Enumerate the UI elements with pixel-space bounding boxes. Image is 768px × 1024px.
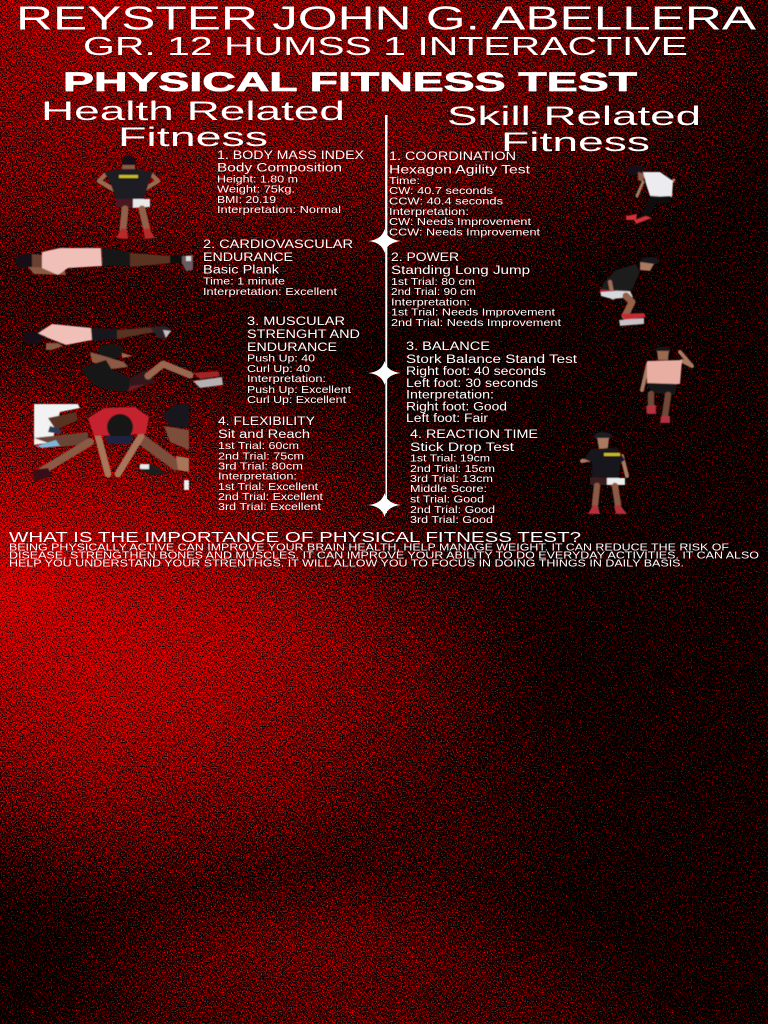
text block: coordination: Time:	[389, 175, 420, 187]
text block: coordination: CCW: Needs Improvement	[389, 226, 540, 238]
text block: reaction time	[410, 429, 538, 526]
text block: flexibility: 2nd Trial: 75cm	[218, 450, 304, 462]
heading: health related fitness: Fitness	[118, 122, 268, 152]
heading: health related fitness: Health Related	[41, 96, 345, 126]
heading: skill related fitness: Skill Related	[447, 101, 701, 131]
text block: cardiovascular endurance: 2. CARDIOVASCULAR	[203, 239, 353, 251]
heading: physical fitness test: PHYSICAL FITNESS TEST	[63, 67, 638, 97]
text block: balance	[406, 341, 578, 425]
text block: power	[391, 252, 561, 329]
text block: body mass index: 1. BODY MASS INDEX	[217, 150, 364, 162]
text block: coordination	[389, 151, 540, 238]
text block: reaction time: Middle Score:	[410, 483, 487, 495]
text block: reaction time: 3rd Trial: 13cm	[410, 473, 493, 485]
text block: muscular strength and endurance	[247, 316, 360, 406]
text block: muscular strength and endurance: Interpretation:	[247, 373, 326, 385]
text block: body mass index: Height: 1.80 m	[217, 174, 298, 186]
text block: muscular strength and endurance: Curl Up: Excellent	[247, 394, 346, 406]
text block: balance: Left foot: Fair	[406, 413, 488, 425]
heading: skill related fitness	[447, 101, 701, 157]
text block: power: 2nd Trial: 90 cm	[391, 286, 476, 298]
text block: body mass index: BMI: 20.19	[217, 194, 276, 206]
text block: balance: Left foot: 30 seconds	[406, 378, 538, 390]
text block: cardiovascular endurance: Basic Plank	[203, 264, 279, 276]
text block: reaction time: 4. REACTION TIME	[410, 429, 538, 441]
text block: muscular strength and endurance: ENDURANCE	[247, 342, 337, 354]
text block: body mass index	[217, 150, 364, 216]
text block: reaction time: 2nd Trial: 15cm	[410, 463, 495, 475]
text block: importance explanation: BEING PHYSICALLY ACTIVE CAN IMPROVE YOUR BRAIN HEALTH, HELP MANAGE WEIGHT. IT CAN REDUCE THE RISK OF	[9, 542, 729, 554]
text block: muscular strength and endurance: Push Up: Excellent	[247, 384, 351, 396]
text block: balance: Interpretation:	[406, 390, 494, 402]
heading: health related fitness	[41, 96, 345, 152]
text block: importance explanation: DISEASE, STRENGTHEN BONES AND MUSCLES. IT CAN IMPROVE YOUR ABILITY TO DO EVERYDAY ACTIVITIES. IT CAN ALSO	[9, 550, 759, 562]
text block: coordination: CW: Needs Improvement	[389, 216, 531, 228]
text block: muscular strength and endurance: STRENGHT AND	[247, 329, 360, 341]
text block: importance explanation: HELP YOU UNDERSTAND YOUR STRENTHGS. IT WILL ALLOW YOU TO FOCUS IN DOING THINGS IN DAILY BASIS.	[9, 558, 684, 570]
photo: reaction time figure	[582, 432, 627, 514]
text block: power: 2. POWER	[391, 252, 459, 264]
text block: body mass index: Body Composition	[217, 162, 342, 174]
text block: cardiovascular endurance: ENDURANCE	[203, 252, 293, 264]
text block: muscular strength and endurance: Push Up: 40	[247, 352, 315, 364]
text block: power: 1st Trial: Needs Improvement	[391, 306, 555, 318]
photo: power figure	[600, 257, 660, 326]
text block: flexibility: 4. FLEXIBILITY	[218, 416, 315, 428]
title: student name: REYSTER JOHN G. ABELLERA	[16, 0, 756, 36]
photo: curl up figure	[81, 344, 223, 392]
heading: importance question: WHAT IS THE IMPORTANCE OF PHYSICAL FITNESS TEST?	[9, 529, 581, 546]
text block: coordination: 1. COORDINATION	[389, 151, 516, 163]
subtitle: grade and section: GR. 12 HUMSS 1 INTERACTIVE	[83, 31, 688, 61]
photo: sit and reach figure	[33, 404, 189, 490]
text block: reaction time: 1st Trial: 19cm	[410, 452, 490, 464]
text block: body mass index: Weight: 75kg.	[217, 184, 295, 196]
text block: power: Standing Long Jump	[391, 265, 530, 277]
text block: muscular strength and endurance: 3. MUSCULAR	[247, 316, 345, 328]
text block: balance: Right foot: 40 seconds	[406, 366, 546, 378]
text block: balance: Stork Balance Stand Test	[406, 354, 578, 366]
timeline divider with sparkles	[368, 115, 401, 517]
text block: flexibility: 2nd Trial: Excellent	[218, 491, 323, 503]
text block: cardiovascular endurance	[203, 239, 353, 298]
text block: power: 2nd Trial: Needs Improvement	[391, 317, 561, 329]
text block: muscular strength and endurance: Curl Up: 40	[247, 363, 310, 375]
text block: reaction time: Stick Drop Test	[410, 442, 515, 454]
text block: coordination: Hexagon Agility Test	[389, 164, 531, 176]
text block: importance explanation	[9, 542, 759, 570]
text block: cardiovascular endurance: Interpretation: Excellent	[203, 286, 337, 298]
text block: power: Interpretation:	[391, 296, 470, 308]
text block: flexibility: 1st Trial: Excellent	[218, 481, 318, 493]
text block: balance: Right foot: Good	[406, 402, 507, 414]
text block: reaction time: 2nd Trial: Good	[410, 504, 495, 516]
photo: basic plank figure	[15, 248, 193, 275]
text block: power: 1st Trial: 80 cm	[391, 276, 475, 288]
text block: flexibility: 3rd Trial: Excellent	[218, 501, 321, 513]
text block: flexibility	[218, 416, 323, 513]
text block: balance: 3. BALANCE	[406, 341, 490, 353]
text block: flexibility: 1st Trial: 60cm	[218, 440, 299, 452]
text block: reaction time: st Trial: Good	[410, 494, 484, 506]
photo: standing figure, body mass index	[99, 155, 158, 239]
text block: coordination: Interpretation:	[389, 206, 469, 218]
text block: coordination: CW: 40.7 seconds	[389, 185, 493, 197]
photo: balance figure	[642, 346, 692, 423]
text block: reaction time: 3rd Trial: Good	[410, 514, 493, 526]
photo: coordination figure	[626, 165, 674, 224]
heading: skill related fitness: Fitness	[501, 127, 650, 157]
text block: flexibility: 3rd Trial: 80cm	[218, 460, 303, 472]
text block: cardiovascular endurance: Time: 1 minute	[203, 276, 285, 288]
photo: push up figure	[23, 324, 172, 350]
text block: body mass index: Interpretation: Normal	[217, 204, 341, 216]
text block: flexibility: Interpretation:	[218, 470, 297, 482]
text block: coordination: CCW: 40.4 seconds	[389, 196, 503, 208]
text block: flexibility: Sit and Reach	[218, 429, 310, 441]
